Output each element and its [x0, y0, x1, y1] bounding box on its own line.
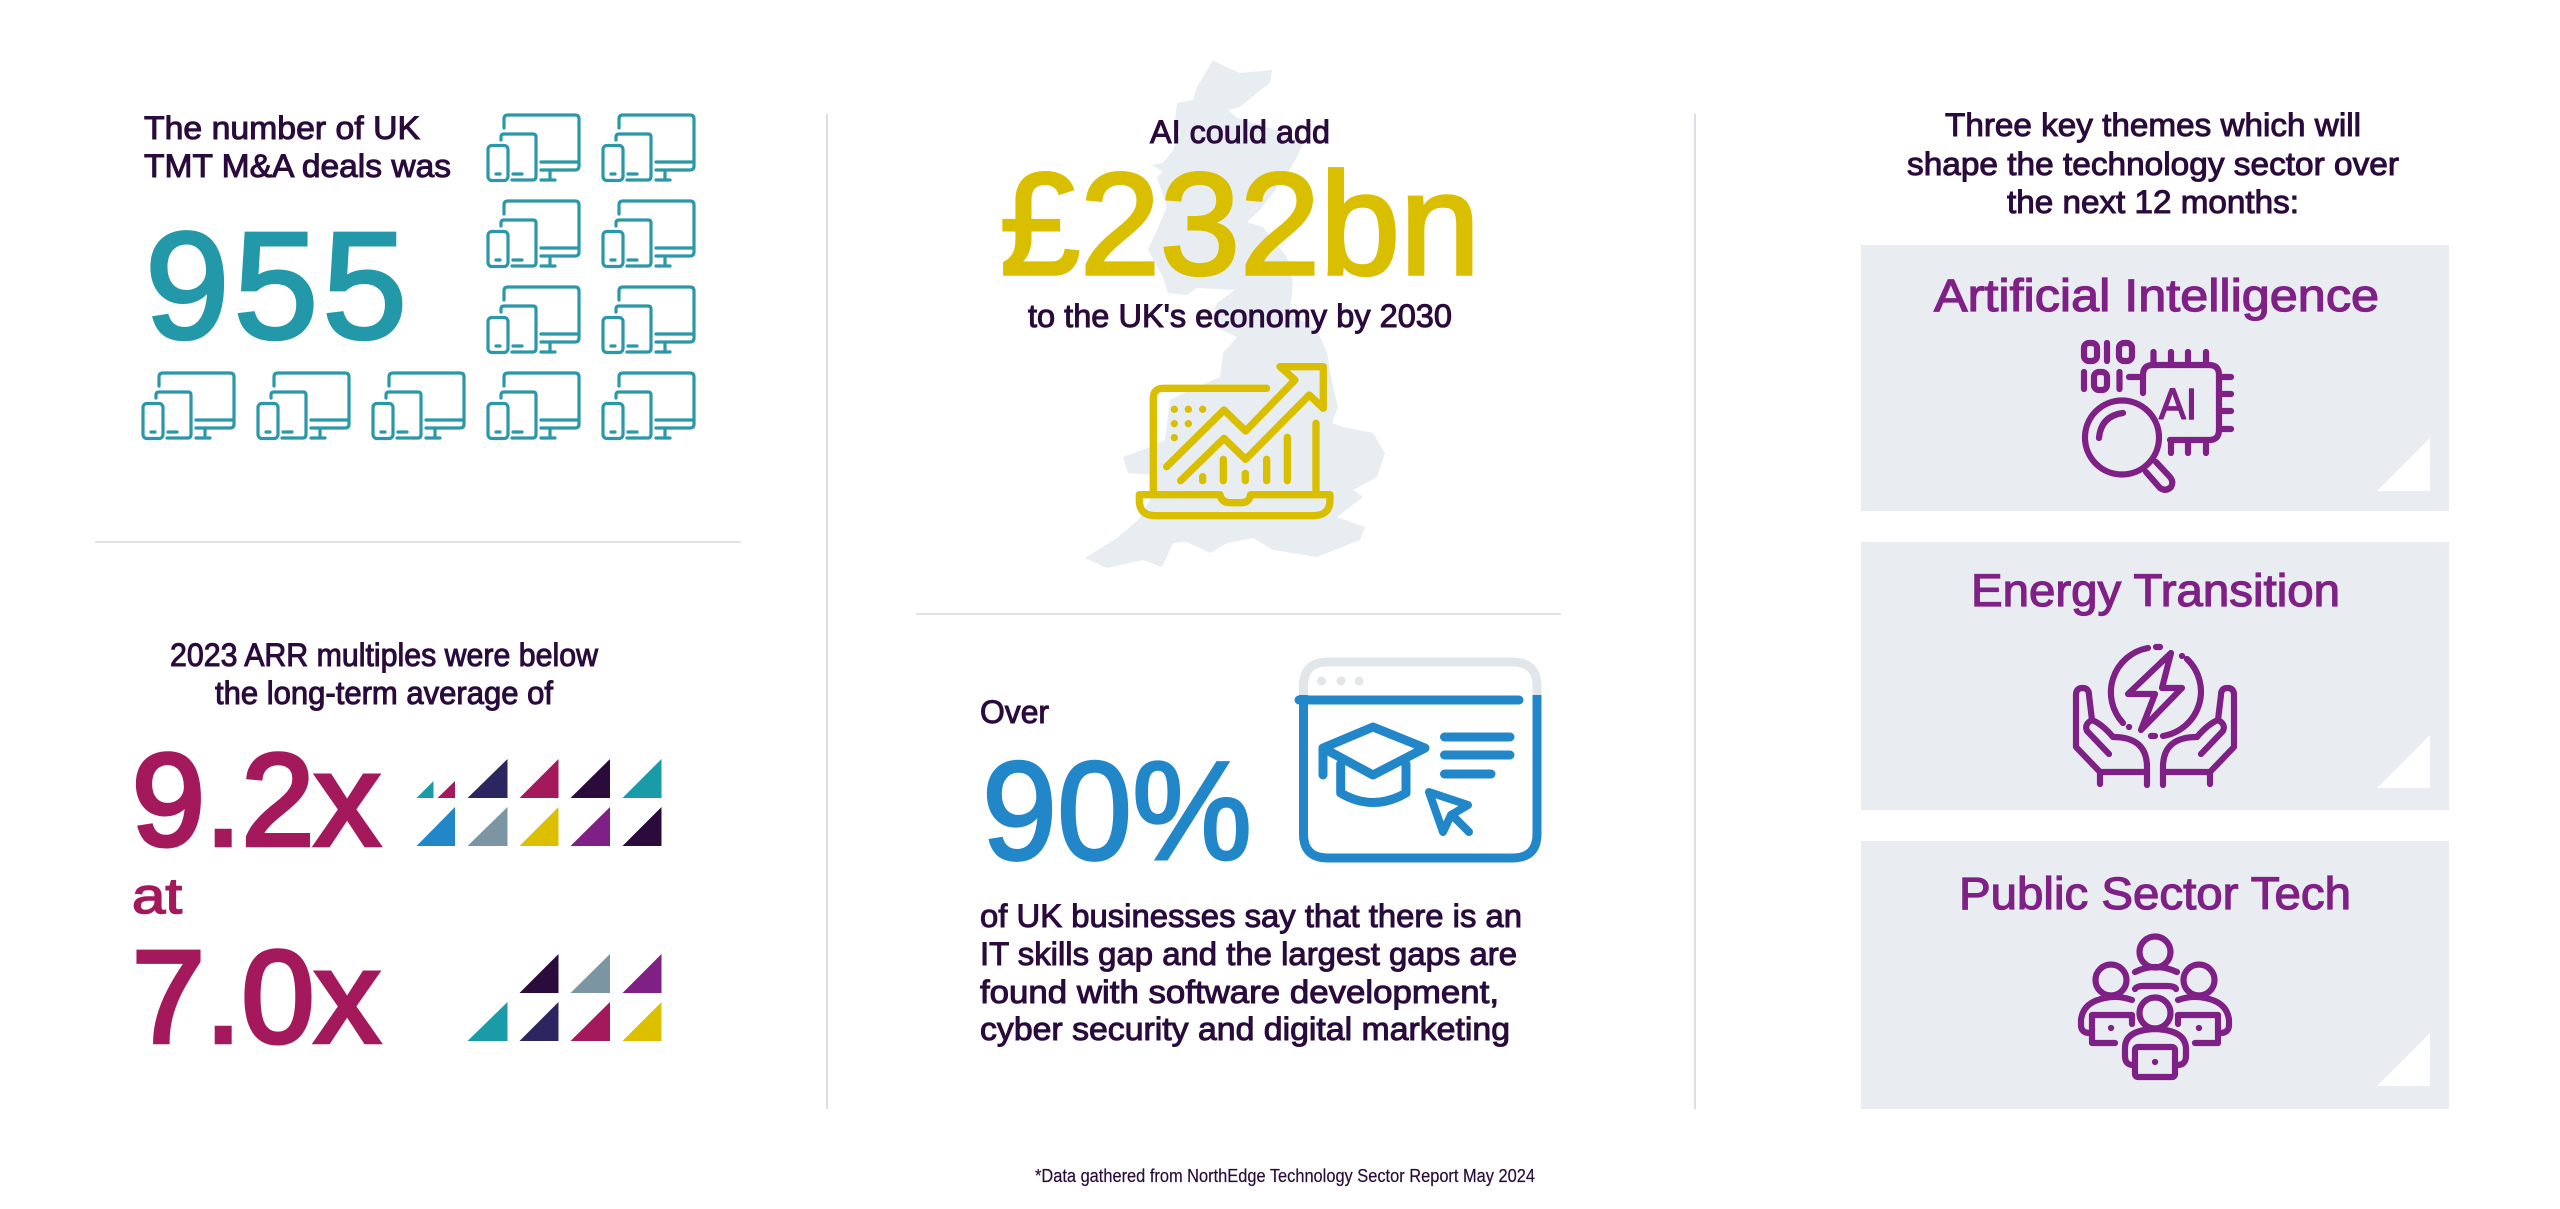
card: Energy Transition [1861, 542, 2449, 810]
text: themes heading: shape the technology sector over [1907, 146, 2399, 182]
text: ARR heading [170, 637, 599, 711]
icon: browser with graduation cap [1299, 662, 1537, 858]
heading: Artificial Intelligence: Artificial Intelligence [1934, 270, 2379, 321]
icon: team with laptops [2081, 936, 2229, 1077]
text: deals heading: TMT M&A deals was [144, 148, 451, 184]
text: AI could add: AI could add [1150, 114, 1330, 150]
text: to the UK's economy by 2030: to the UK's economy by 2030 [1028, 298, 1452, 334]
text: IT skills gap description: cyber security and digital marketing [980, 1011, 1510, 1047]
triangles: 7.0x pictogram [468, 954, 662, 1041]
stat: 9.2x: 9.2x [132, 726, 380, 873]
heading: Energy Transition: Energy Transition [1971, 565, 2340, 616]
text: ARR heading: 2023 ARR multiples were below [170, 637, 599, 673]
map: UK silhouette [1085, 60, 1385, 568]
icons: grid of device icons [143, 115, 694, 438]
panel: IT skills gap [980, 662, 1537, 1047]
panel: UK TMT M&A deals [143, 110, 694, 438]
icon: AI chip and magnifier [2084, 343, 2231, 490]
text: IT skills gap description [980, 898, 1522, 1047]
text: themes heading [1907, 107, 2399, 220]
text: at: at [132, 868, 182, 924]
text: ARR heading: the long-term average of [215, 675, 553, 711]
stat: 7.0x: 7.0x [132, 923, 380, 1070]
card: Public Sector Tech [1861, 841, 2449, 1109]
text: IT skills gap description: of UK businesses say that there is an [980, 898, 1522, 934]
icon: hands holding energy bolt [2076, 647, 2234, 785]
icon: laptop with rising chart [1139, 367, 1330, 516]
text: themes heading: Three key themes which will [1945, 107, 2361, 143]
heading: Public Sector Tech: Public Sector Tech [1959, 868, 2351, 919]
text: deals heading: The number of UK [144, 110, 420, 146]
stat: 90%: 90% [982, 732, 1252, 889]
text: themes heading: the next 12 months: [2007, 184, 2299, 220]
card: Artificial Intelligence [1861, 245, 2449, 511]
text: IT skills gap description: found with software development, [980, 974, 1499, 1010]
footnote: *Data gathered from NorthEdge Technology Sector Report May 2024 [1035, 1166, 1535, 1186]
triangles: 9.2x pictogram [416, 759, 662, 846]
panel: ARR multiples [132, 637, 662, 1070]
panel: AI economic value [1000, 60, 1480, 568]
text: IT skills gap description: IT skills gap and the largest gaps are [980, 936, 1517, 972]
text: deals heading [144, 110, 451, 184]
stat: 955: 955 [145, 201, 407, 371]
icon: AI chip and magnifier: AI [2159, 380, 2197, 429]
text: Over: Over [980, 694, 1049, 730]
panel: three key themes [1861, 107, 2449, 1109]
stat: £232bn: £232bn [1000, 143, 1480, 305]
